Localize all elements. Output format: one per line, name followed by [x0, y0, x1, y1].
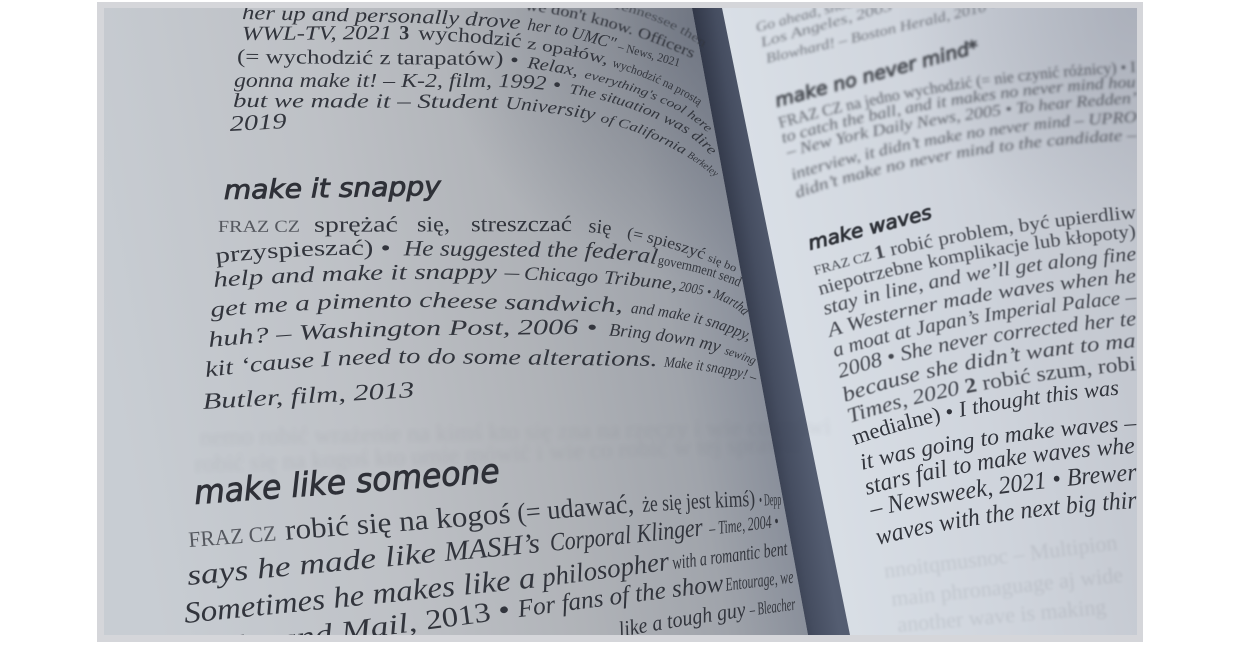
- definition text: make no never mind: [777, 60, 1137, 199]
- definition text: make like someone: [185, 490, 795, 635]
- right page: end of previous entry: Blowhard! – Boston Herald, 2010 •: [766, 8, 987, 64]
- definition text: make it snappy: FRAZ CZ sprężać się, streszczać się (= spieszyćsię bo: [218, 216, 736, 272]
- right page bleed-through text: nnoitqmusnoc – Multipion: [883, 530, 1119, 583]
- definition text: make waves: because she didn’t want to ma: [842, 336, 1135, 402]
- definition text: make it snappy: przyspieszać) • He suggested the federalgovernment send: [216, 240, 742, 287]
- definition text: make no never mind: interview, it didn’t make no never mind – UPRO: [791, 110, 1137, 181]
- definition text: make waves: FRAZ CZ 1 robić problem, być upierdliw: [812, 206, 1136, 276]
- definition text: make it snappy: Butler, film, 2013: [203, 382, 413, 409]
- definition text: make it snappy: [203, 216, 756, 409]
- right page: entry make waves: waves with the next big thir: [873, 487, 1138, 551]
- right page: entry make waves: [808, 206, 1137, 544]
- heading: make like someone: make like someone: [196, 464, 498, 504]
- left page: end of previous entry: but we made it – Student University of CaliforniaBerkeley: [234, 93, 718, 176]
- definition text: make waves: niepotrzebne komplikacje lub kłopoty): [818, 224, 1136, 296]
- book spine gutter: [692, 8, 850, 635]
- left page: entry make it snappy: [203, 177, 756, 409]
- definition text: make waves: stay in line, and we’ll get along fine: [824, 248, 1136, 316]
- left page: end of previous entry: WWL-TV, 2021 3 wychodzić z opałów,wychodzić na prostą: [244, 26, 701, 108]
- right page bleed-through text: main phronaguage aj wide: [890, 562, 1124, 611]
- right page: entry make no never mind: [774, 38, 1137, 199]
- right page bleed-through text: another wave is making: [896, 594, 1107, 637]
- left page: entry make like someone: [185, 464, 795, 635]
- definition text: make no never mind: didn’t make no never mind to the candidate –: [794, 130, 1137, 199]
- left page: end of previous entry: [230, 8, 718, 176]
- definition text: make it snappy: help and make it snappy – Chicago Tribune,2005 • Martha: [214, 264, 748, 316]
- heading: make waves: make waves: [808, 207, 932, 251]
- right page: entry make waves: stars fail to make waves whe: [862, 433, 1136, 501]
- right page: entry make waves: – Newsweek, 2021 • Brewer: [866, 459, 1138, 523]
- definition text: make it snappy: kit ‘cause I need to do some alterations. Make it snappy! –: [206, 348, 756, 380]
- definition text: make no never mind: – New York Daily News, 2005 • To hear Redden’: [786, 92, 1137, 156]
- definition text: make waves: 2008 • She never corrected her te: [838, 314, 1136, 378]
- left page: end of previous entry: 2019: [230, 114, 286, 131]
- right page: [722, 8, 1137, 635]
- definition text: make waves: [812, 206, 1137, 423]
- right page: entry make waves: medialne) • I thought this was: [848, 375, 1120, 450]
- definition text: make waves: a moat at Japan’s Imperial Palace –: [834, 293, 1137, 358]
- definition text: make no never mind: FRAZ CZ na jedno wychodzić (= nie czynić różnicy) • I: [777, 60, 1136, 129]
- definition text: make no never mind: to catch the ball, and it makes no never mind hou: [780, 76, 1136, 144]
- heading: make it snappy: make it snappy: [224, 177, 442, 202]
- definition text: make like someone: says he made like MASH’s Corporal Klinger– Time, 2004 •: [188, 516, 778, 588]
- left page bleed-through text: nemo robić wrażenie na kimś kto się zna na rzeczy i wie co mówi: [200, 414, 831, 451]
- definition text: make it snappy: get me a pimento cheese sandwich, and make it snappy,: [211, 292, 749, 342]
- definition text: make waves: Times, 2020 2 robić szum, robi: [847, 356, 1136, 423]
- definition text: make it snappy: huh? – Washington Post, 2006 • Bring down mysewing: [210, 320, 756, 366]
- definition text: make like someone: FRAZ CZrobić się na kogoś(= udawać, że się jest kimś)• Depp: [188, 490, 781, 547]
- right page: entry make waves: it was going to make waves –: [857, 410, 1137, 475]
- left page: end of previous entry: (= wychodzić z tarapatów) • Relax, everything's cool here: [238, 49, 711, 132]
- left page: end of previous entry: her up and personally drove her to UMC"– News, 2021: [242, 8, 679, 66]
- left page: end of previous entry: gonna make it! – K-2, film, 1992 • The situation was dire: [234, 73, 715, 154]
- left page: [104, 8, 808, 635]
- definition text: make like someone: like a tough guy– Bleacher: [620, 598, 795, 635]
- definition text: make waves: A Westerner made waves when he: [828, 269, 1136, 338]
- heading: make no never mind: make no never mind*: [774, 38, 980, 109]
- definition text: make like someone: Sometimes he makes like aphilosopherwith a romantic bent: [185, 544, 788, 623]
- right page bleed-through text: [886, 541, 1116, 631]
- left page bleed-through text: robić się na kogoś kto umie mówić i wie co robić w tej sprawie: [194, 431, 802, 478]
